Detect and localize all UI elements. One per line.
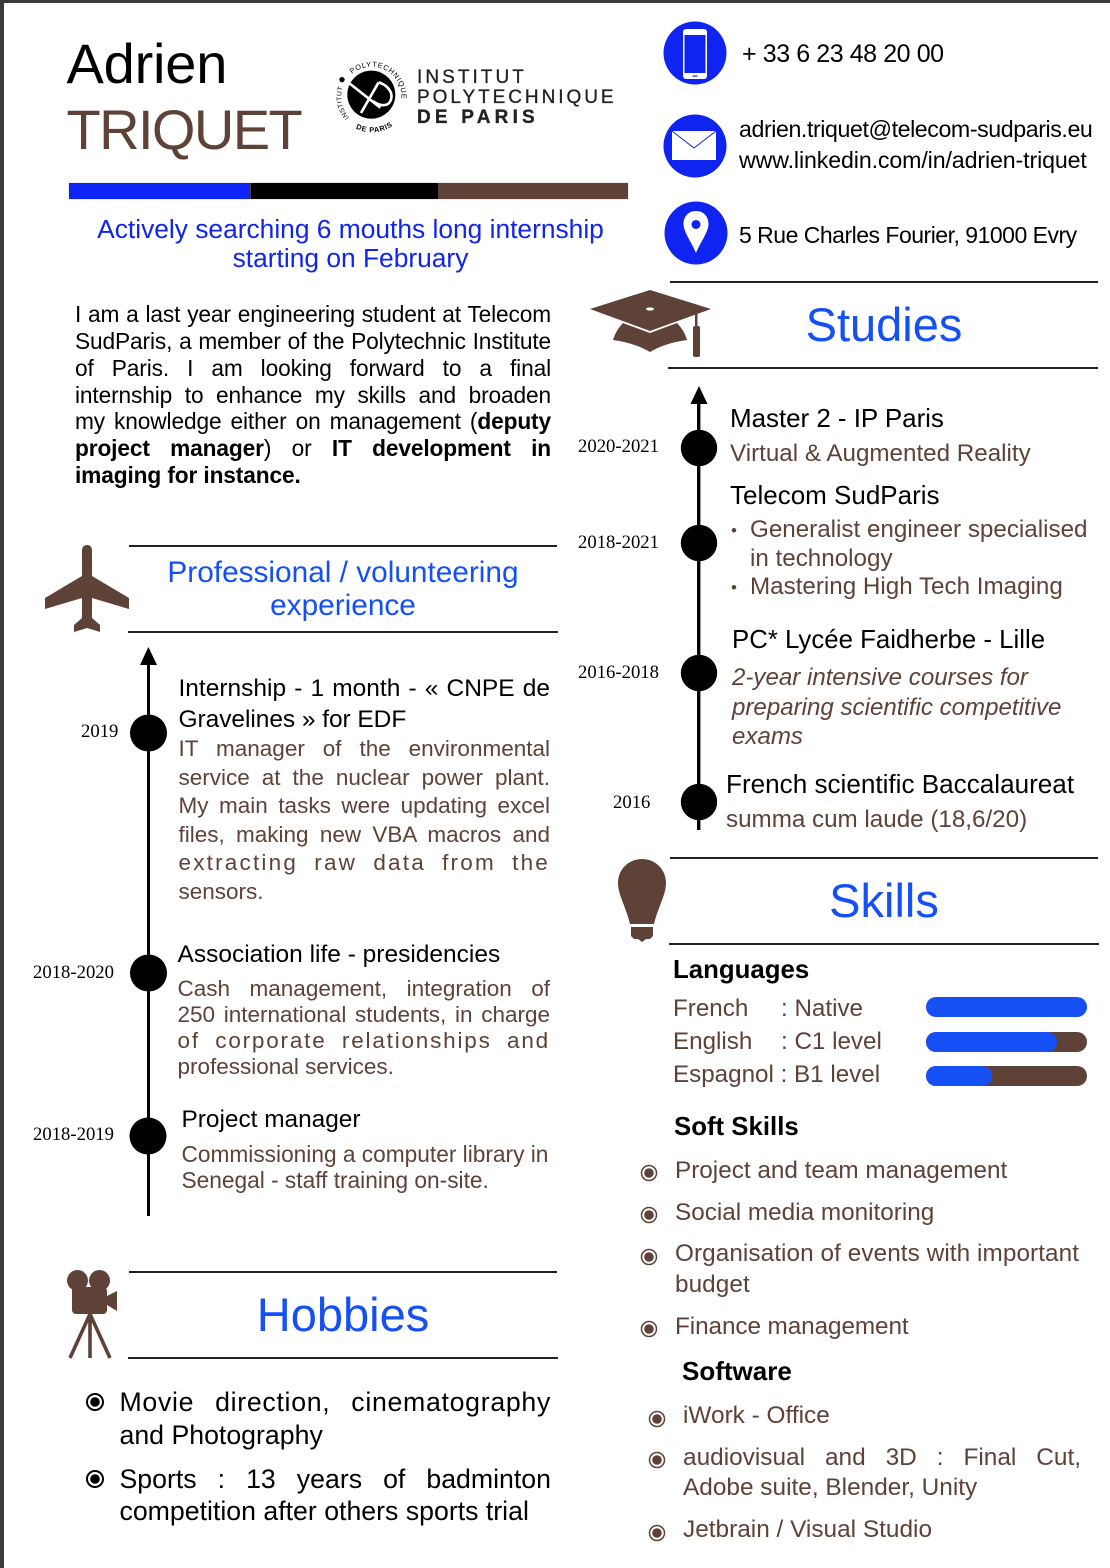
date: 2016: 2016 [613, 792, 650, 813]
email and linkedin [739, 116, 1092, 173]
entry: telecom sudparis [730, 480, 1087, 600]
skill: social media monitoring: Social media monitoring [675, 1199, 934, 1226]
entry title: Association life - presidencies [178, 941, 500, 968]
intro text: project manager) or IT development in [75, 435, 551, 461]
logo wordmark [417, 67, 617, 128]
language list: : C1 level [781, 1028, 882, 1055]
entry description [731, 664, 1061, 750]
logo emblem [336, 62, 407, 132]
entry subtitle: summa cum laude (18,6/20) [726, 806, 1027, 833]
bar: french [926, 997, 1087, 1017]
entry description: IT manager of the environmental [178, 736, 550, 761]
hobby text: Sports : 13 years of badminton [120, 1464, 551, 1494]
divider: black segment [251, 183, 438, 199]
software: audiovisual [683, 1443, 1081, 1503]
entry title: Telecom SudParis [730, 480, 940, 510]
entry description: My main tasks were updating excel [178, 793, 550, 818]
skill: project and team management: Project and team management [675, 1157, 1007, 1184]
hobby text [120, 1464, 551, 1526]
entry bullets: • [731, 521, 737, 540]
entry description: exams [732, 723, 803, 750]
software: jetbrain: Jetbrain / Visual Studio [683, 1516, 932, 1543]
bullet icons [640, 1154, 660, 1334]
entry title: Project manager [182, 1106, 360, 1133]
date: 2020-2021: 2020-2021 [578, 436, 659, 457]
entry description [178, 736, 550, 904]
bar fill: espagnol [926, 1066, 992, 1086]
entry bullets: Generalist engineer specialised [750, 516, 1087, 543]
panel: header [66, 32, 628, 200]
section rule bottom [128, 1357, 558, 1359]
date: 2018-2021: 2018-2021 [578, 532, 659, 553]
hobby: movies [86, 1387, 551, 1450]
entry description [182, 1141, 548, 1193]
software: iWork: iWork - Office [683, 1402, 830, 1429]
section rule top [129, 1271, 557, 1273]
panel: hobbies [67, 1270, 558, 1526]
entry description: service at the nuclear power plant. [178, 765, 550, 790]
bar fill: english [926, 1032, 1057, 1052]
entry description: Cash management, integration of [178, 976, 550, 1001]
heading: experience: experience [270, 589, 416, 622]
section rule bottom [669, 943, 1099, 945]
intro text: internship to enhance my skills and broaden [75, 382, 551, 408]
entry title: Master 2 - IP Paris [730, 403, 944, 433]
panel: skills [618, 857, 1099, 1543]
heading: hobbies: Hobbies [257, 1288, 429, 1341]
intro text: imaging for instance. [75, 462, 301, 488]
panel: contact [664, 22, 1092, 264]
tagline: starting on February [233, 243, 468, 273]
tagline: Actively searching 6 mouths long internship [97, 214, 604, 244]
subheading: soft skills: Soft Skills [674, 1113, 799, 1141]
panel: studies [578, 281, 1098, 833]
hobby text: Movie direction, cinematography [120, 1387, 551, 1417]
tricolor divider [69, 183, 628, 199]
bullet [86, 1470, 104, 1488]
section rule top [670, 281, 1098, 283]
language bars [926, 997, 1087, 1087]
icon: airplane [45, 545, 129, 632]
logo emblem: INSTITUT [336, 86, 349, 120]
soft skills list [640, 1155, 1085, 1345]
entry bullets [731, 516, 1087, 600]
logo: Institut Polytechnique de Paris [336, 62, 617, 132]
phone number: + 33 6 23 48 20 00 [742, 40, 944, 68]
entry subtitle: Virtual & Augmented Reality [730, 440, 1031, 467]
intro text: I am a last year engineering student at Telecom [75, 301, 551, 327]
name: first name: Adrien [66, 32, 227, 95]
heading: skills: Skills [829, 874, 939, 927]
icon: graduation cap [590, 290, 711, 357]
language list: : Native [781, 995, 863, 1022]
subheading: software: Software [682, 1356, 792, 1386]
panel: professional / volunteering experience [33, 545, 558, 1216]
intro text: my knowledge either on management (deputy [75, 408, 551, 434]
date: 2018-2020: 2018-2020 [33, 962, 114, 983]
entry description: 250 international students, in charge [178, 1002, 550, 1027]
bar: espagnol [926, 1066, 1087, 1086]
icon: envelope [664, 114, 726, 178]
icon: light bulb [618, 859, 666, 942]
entry description: professional services. [178, 1054, 394, 1079]
heading: experience [167, 556, 519, 622]
section rule bottom [668, 367, 1098, 369]
timeline: experience [130, 647, 167, 1216]
entry: project manager [182, 1106, 548, 1193]
entry description [178, 976, 550, 1079]
email and linkedin: www.linkedin.com/in/adrien-triquet [739, 147, 1087, 173]
language list: French [673, 995, 748, 1022]
hobby text: competition after others sports trial [120, 1496, 529, 1526]
logo wordmark: POLYTECHNIQUE [417, 87, 617, 108]
date: 2016-2018: 2016-2018 [578, 662, 659, 683]
entry description: of corporate relationships and [178, 1028, 550, 1053]
entry title: PC* Lycée Faidherbe - Lille [732, 626, 1045, 654]
email and linkedin: adrien.triquet@telecom-sudparis.eu [739, 116, 1092, 142]
entry description: Senegal - staff training on-site. [182, 1167, 489, 1193]
language list: Espagnol : B1 level [673, 1061, 880, 1088]
entry description: files, making new VBA macros and [178, 822, 550, 847]
subheading: languages: Languages [673, 956, 809, 984]
entry title: French scientific Baccalaureat [726, 769, 1074, 799]
heading: experience: Professional / volunteering [167, 556, 519, 589]
skill: organisation of events: budget [675, 1271, 750, 1298]
address: 5 Rue Charles Fourier, 91000 Evry [739, 222, 1077, 248]
section rule top [670, 857, 1098, 859]
entry bullets: • [731, 578, 737, 597]
software: audiovisual: Adobe suite, Blender, Unity [683, 1474, 977, 1501]
hobby text [120, 1387, 551, 1450]
entry: lycee faidherbe [731, 626, 1061, 750]
intro text [75, 301, 551, 488]
skill: finance management: Finance management [675, 1313, 909, 1340]
hobby text: and Photography [120, 1420, 323, 1450]
hobby: sports [86, 1464, 551, 1526]
logo wordmark: DE PARIS [417, 107, 539, 128]
icon: phone [664, 22, 726, 84]
icon: film camera on tripod [67, 1270, 117, 1359]
entry: baccalaureat [726, 769, 1074, 833]
section rule bottom [128, 631, 558, 633]
intro text: SudParis, a member of the Polytechnic Institute [75, 328, 551, 354]
skill: organisation of events [675, 1238, 1079, 1300]
logo emblem: POLYTECHNIQUE [350, 62, 407, 98]
divider: blue segment [69, 183, 250, 199]
name: surname: TRIQUET [66, 98, 301, 161]
entry description: preparing scientific competitive [732, 694, 1061, 720]
heading: studies: Studies [806, 298, 962, 351]
entry description: Commissioning a computer library in [182, 1141, 548, 1167]
intro text: of Paris. I am looking forward to a final [75, 355, 551, 381]
entry bullets: in technology [750, 545, 893, 572]
entry bullets: Mastering High Tech Imaging [750, 573, 1063, 600]
entry description: extracting raw data from the [178, 850, 550, 875]
bullet icons [648, 1399, 668, 1549]
entry title [178, 675, 550, 733]
entry description: sensors. [178, 879, 264, 904]
entry title: Internship - 1 month - « CNPE de [178, 675, 550, 702]
entry title: Gravelines » for EDF [178, 706, 406, 733]
logo wordmark: INSTITUT [417, 67, 527, 88]
logo emblem: DE PARIS [356, 122, 392, 132]
entry: association life [178, 941, 550, 1079]
section rule top [129, 545, 557, 547]
icon: map pin [664, 202, 728, 264]
entry: master [730, 403, 1031, 467]
software: audiovisual: audiovisual and 3D : Final Cut, [683, 1444, 1081, 1471]
entry description: 2-year intensive courses for [732, 664, 1028, 691]
software list [648, 1400, 1083, 1550]
bar: english [926, 1032, 1087, 1052]
entry: internship [178, 675, 550, 904]
tagline [97, 214, 604, 273]
language list: English [673, 1028, 752, 1055]
date: 2018-2019: 2018-2019 [33, 1124, 114, 1145]
skill: organisation of events: Organisation of events with important [675, 1240, 1079, 1267]
timeline: studies [680, 386, 718, 830]
language list [673, 992, 913, 1092]
bullet [86, 1393, 104, 1411]
date: 2019: 2019 [81, 721, 118, 742]
